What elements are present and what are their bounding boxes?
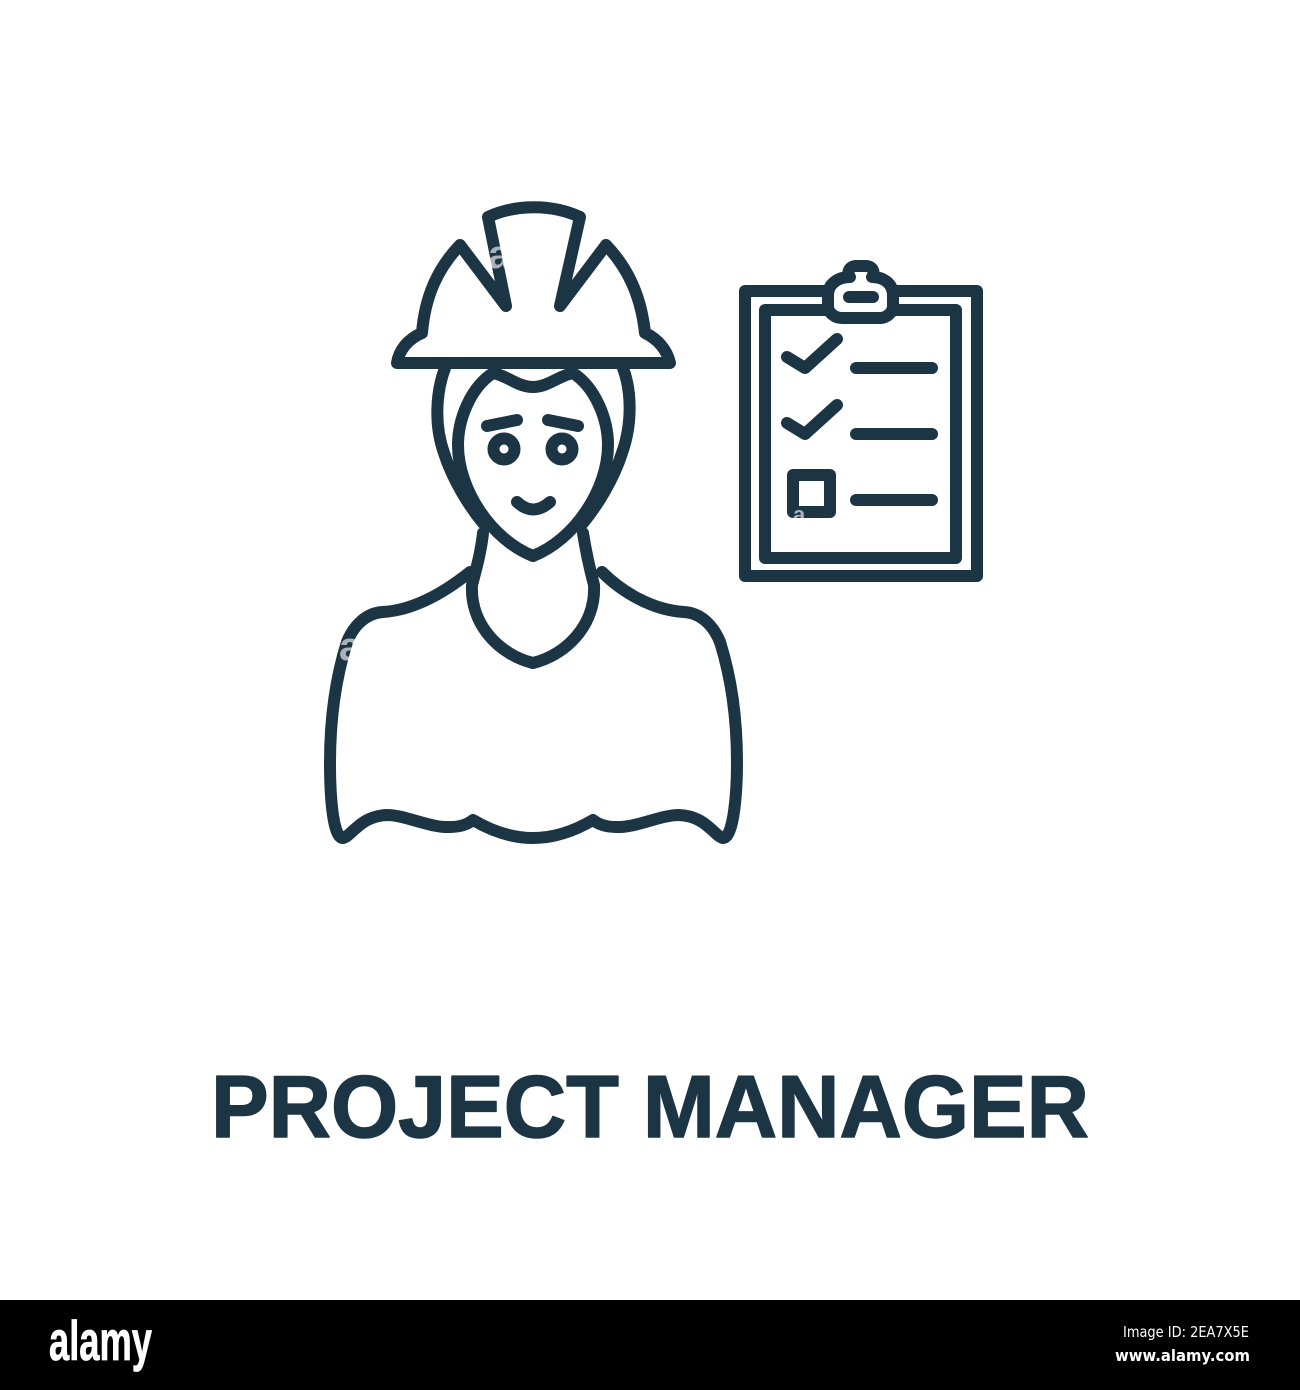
torso — [330, 572, 737, 838]
icon: hard hat — [397, 207, 670, 363]
watermark fragments — [339, 233, 806, 669]
list line 3 — [856, 494, 932, 506]
check mark 1 — [787, 339, 837, 368]
list line 1 — [856, 362, 932, 374]
footer bar — [0, 1300, 1300, 1390]
footer logo: alamy — [49, 1309, 152, 1372]
icon: clipboard checklist — [745, 266, 977, 576]
watermark fragments: a — [793, 502, 806, 527]
neck and collar — [472, 533, 594, 663]
list line 2 — [856, 428, 932, 440]
hair — [437, 368, 630, 523]
clip slot — [849, 291, 873, 303]
icon: project manager person — [330, 207, 737, 838]
face outline — [458, 373, 608, 556]
website: www.alamy.com — [1115, 1346, 1250, 1365]
title: PROJECT MANAGER — [211, 1057, 1089, 1156]
smile — [517, 502, 550, 510]
eyebrows — [487, 420, 578, 426]
empty checkbox — [793, 475, 830, 512]
image id: Image ID: 2EA7X5E — [1123, 1323, 1249, 1341]
clipboard inner sheet — [765, 310, 956, 558]
watermark fragments: a — [339, 625, 362, 669]
watermark fragments: a — [488, 233, 511, 277]
eyes — [494, 438, 572, 460]
clipboard clip — [828, 266, 893, 318]
check mark 2 — [787, 405, 837, 434]
clipboard outer board — [745, 291, 977, 576]
